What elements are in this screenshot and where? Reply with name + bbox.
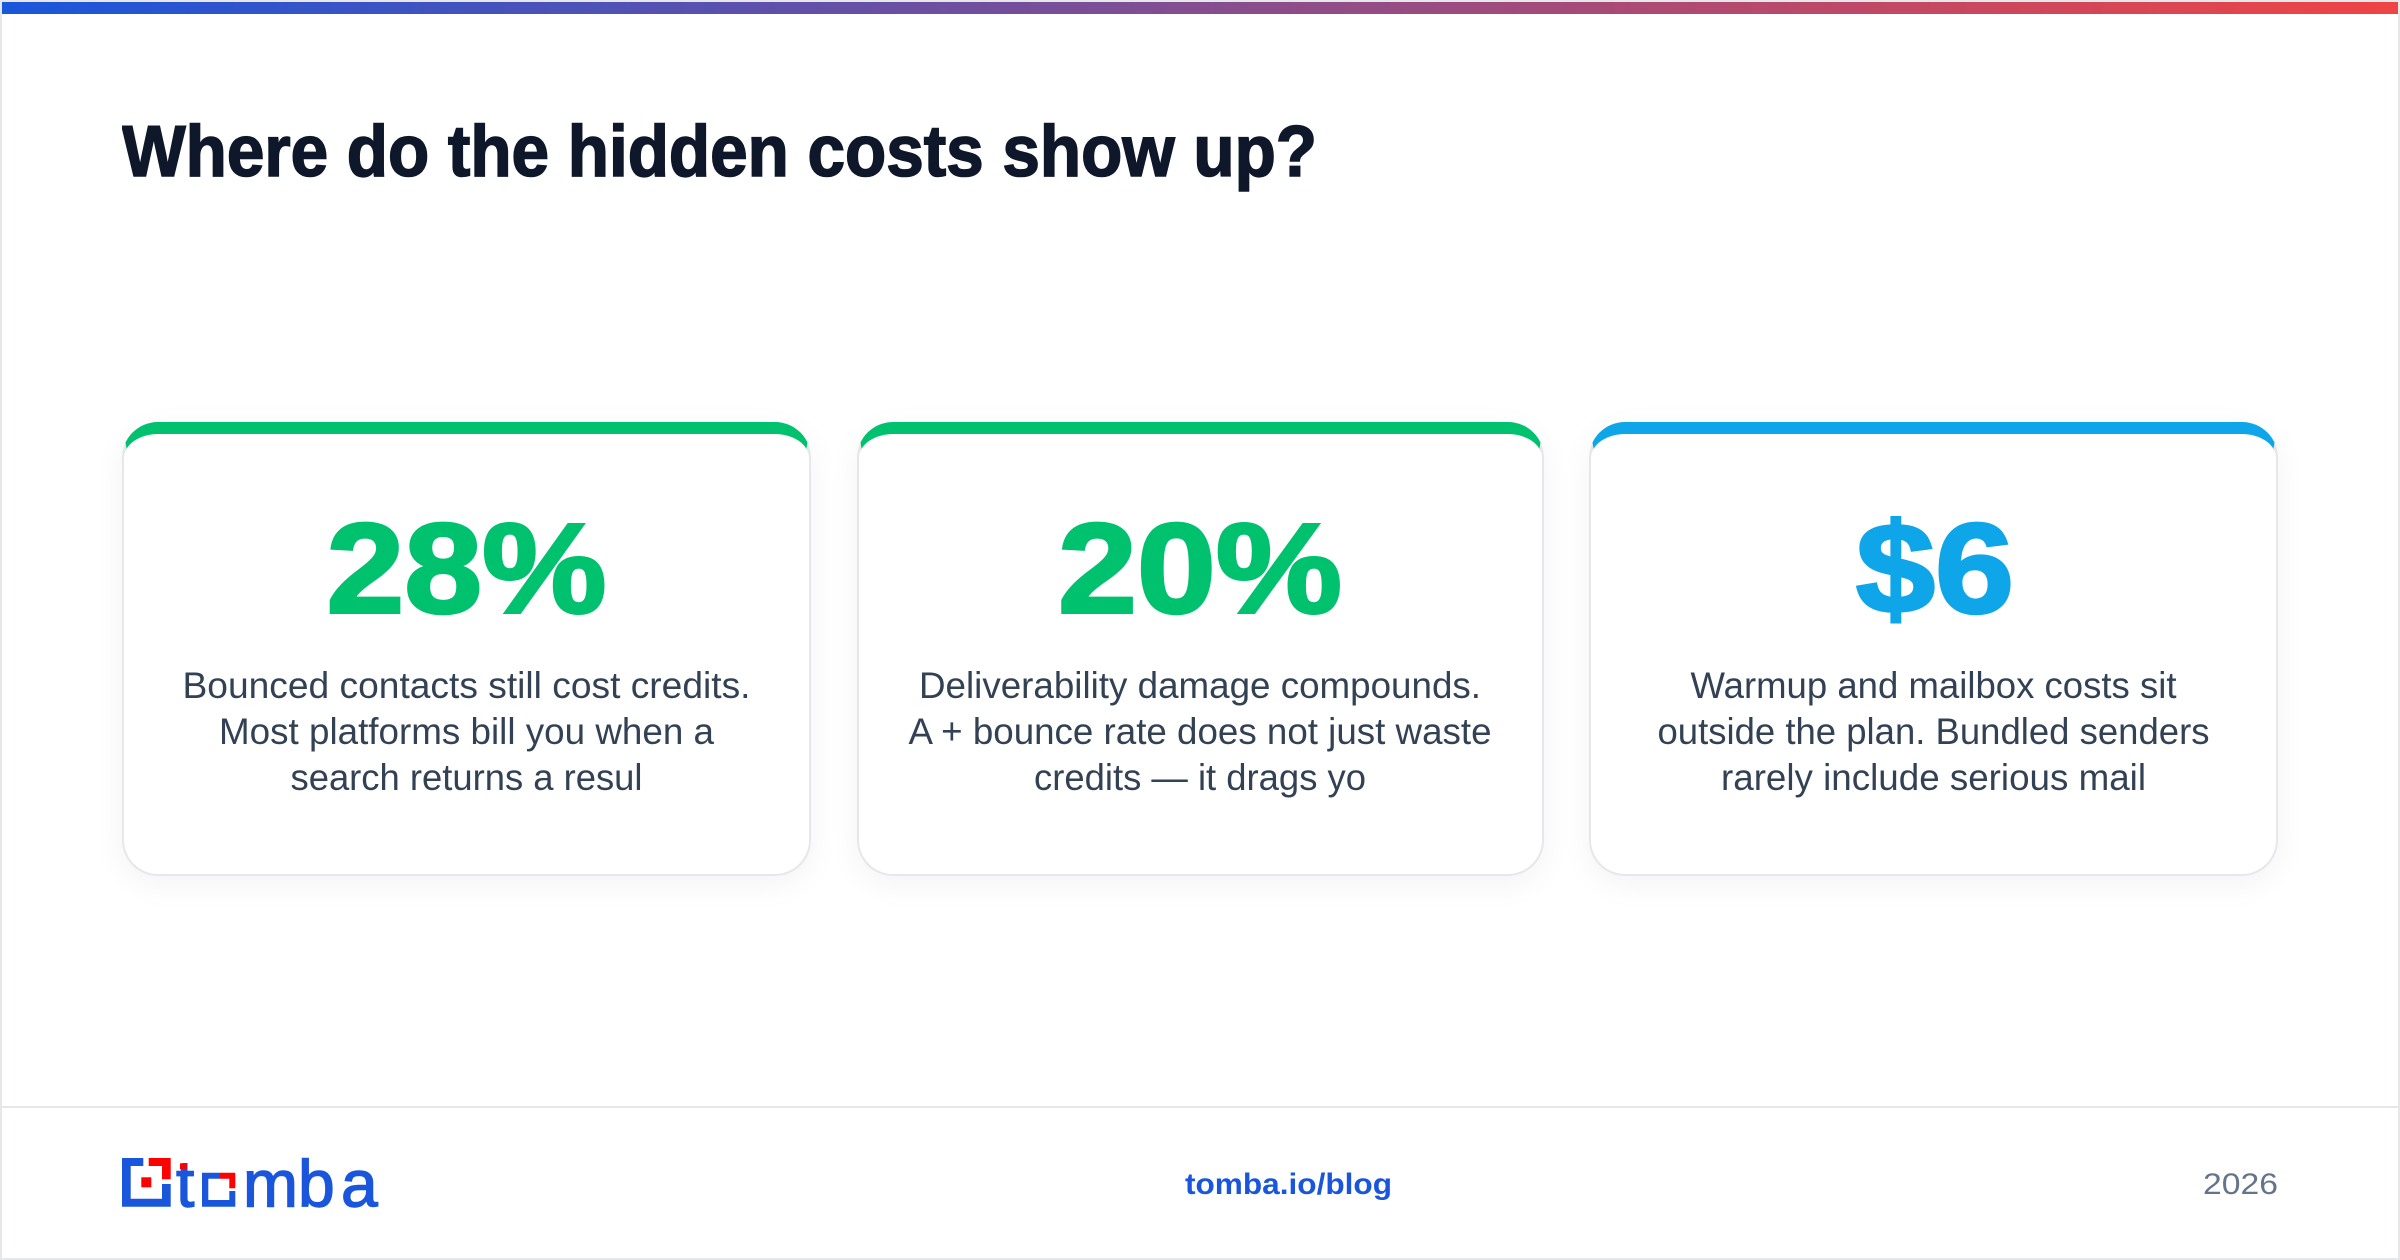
icon: red dot on t (180, 1163, 187, 1169)
stat: $6: $6 (1856, 498, 2014, 640)
logo: tomba (122, 1150, 378, 1214)
stat: 28%: 28% (326, 498, 606, 640)
description: bounced contacts: Bounced contacts still cost credits. (182, 665, 750, 706)
panel: 28% bounced contacts card (122, 422, 811, 876)
description: warmup and mailbox: outside the plan. Bundled senders (1658, 711, 2210, 752)
description: warmup and mailbox (1658, 665, 2210, 798)
panel: $6 warmup and mailbox card (1589, 422, 2278, 876)
footer divider line (2, 1106, 2398, 1108)
icon: logo square mark (122, 1158, 171, 1207)
description: warmup and mailbox: Warmup and mailbox costs sit (1690, 665, 2177, 706)
footer year: 2026 (2203, 1168, 2278, 1201)
description: bounced contacts: search returns a resul (290, 757, 642, 798)
description: bounced contacts (182, 665, 750, 798)
description: bounced contacts: Most platforms bill you when a (219, 711, 714, 752)
panel: 20% deliverability card (857, 422, 1544, 876)
description: deliverability damage: A + bounce rate does not just waste (908, 711, 1492, 752)
footer link: tomba.io/blog (1185, 1168, 1392, 1201)
description: warmup and mailbox: rarely include serious mail (1721, 757, 2146, 798)
description: deliverability damage: credits — it drags yo (1034, 757, 1366, 798)
description: deliverability damage (908, 665, 1492, 798)
top gradient bar (2, 2, 2398, 14)
description: deliverability damage: Deliverability damage compounds. (919, 665, 1481, 706)
icon: square o of wordmark (202, 1173, 235, 1207)
stat: 20%: 20% (1058, 498, 1342, 640)
